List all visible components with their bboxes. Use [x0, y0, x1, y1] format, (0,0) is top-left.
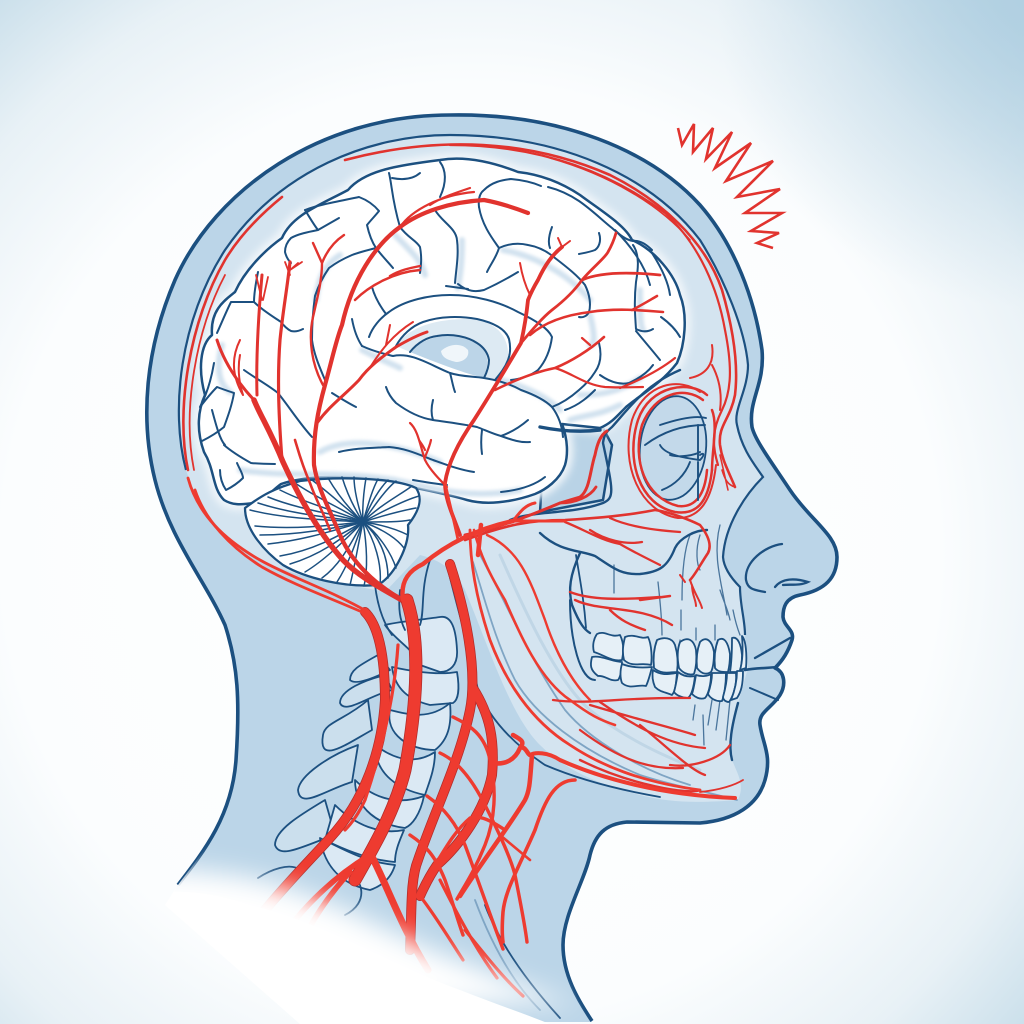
bottom white fade	[170, 850, 584, 1022]
fade body	[266, 989, 544, 1022]
brain halo	[199, 159, 685, 504]
cerebellum	[245, 477, 420, 586]
head outline	[147, 115, 837, 1021]
left trunk	[254, 400, 407, 603]
gyri lines	[200, 162, 680, 492]
skull arteries	[183, 144, 736, 490]
fade edge	[174, 850, 584, 1019]
sinus cavity	[540, 428, 612, 512]
face arteries	[465, 431, 743, 792]
ventricle fill	[410, 336, 489, 378]
teeth	[591, 633, 746, 702]
pain zigzag icon	[678, 124, 782, 248]
cerebellum folia	[250, 477, 419, 586]
central trunk	[314, 200, 528, 603]
brain arteries	[217, 188, 675, 603]
main vessels	[188, 478, 735, 996]
vertebral bodies	[320, 617, 458, 890]
spinous processes	[275, 655, 392, 851]
right trunk	[445, 247, 562, 535]
arc band tint	[396, 319, 508, 380]
eye orbit	[629, 384, 716, 518]
brain shadows	[219, 235, 643, 494]
neck and jaw structures	[258, 555, 737, 1018]
skull and face bone	[179, 135, 763, 802]
nose	[745, 544, 808, 700]
fine bone lines	[614, 525, 740, 745]
brain	[199, 159, 685, 504]
orbit red rings	[629, 384, 716, 518]
zygomatic and mandible lines	[510, 370, 738, 760]
head silhouette	[147, 115, 837, 1022]
orbit blue fill	[635, 393, 711, 503]
neck arteries	[188, 478, 735, 996]
cervical vertebrae	[275, 617, 458, 890]
skull inner line	[179, 135, 763, 635]
double occipital vessel	[188, 478, 368, 612]
ventricle highlight	[441, 345, 468, 362]
arteries dark edge	[265, 564, 493, 950]
eyelids	[645, 417, 706, 500]
head fill	[147, 115, 837, 1022]
